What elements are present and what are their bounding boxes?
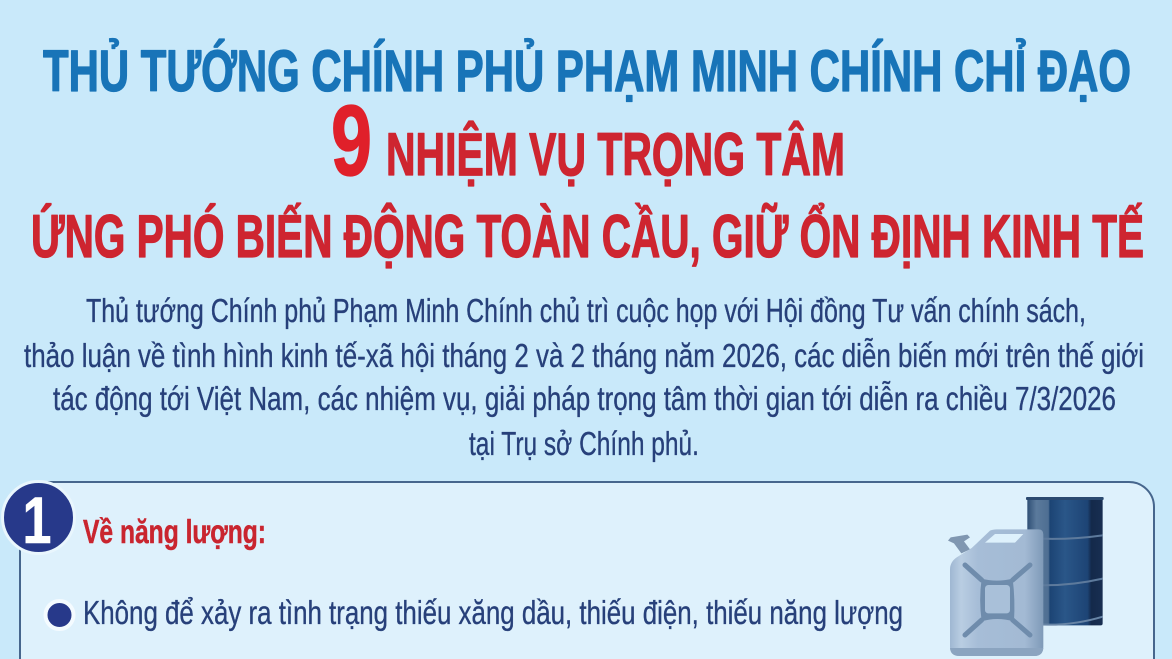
title line 2: NHIỆM VỤ TRỌNG TÂM bbox=[386, 121, 845, 188]
number badge 1 bbox=[2, 482, 74, 557]
intro text block: tại Trụ sở Chính phủ. bbox=[469, 425, 699, 462]
panel background bbox=[20, 482, 1154, 659]
title bbox=[31, 39, 1144, 270]
icon: oil barrel bbox=[1026, 497, 1104, 625]
number badge 1: 1 bbox=[22, 483, 52, 557]
title number 9: 9 bbox=[331, 85, 372, 197]
panel: energy bbox=[2, 482, 1154, 659]
section heading: Về năng lượng: bbox=[83, 513, 266, 550]
bullet text: Không để xảy ra tình trạng thiếu xăng dầu, thiếu điện, thiếu năng lượng bbox=[83, 594, 903, 631]
bullet dot bbox=[46, 601, 74, 629]
bullet item bbox=[46, 594, 903, 631]
icon: barrel and jerry can bbox=[948, 497, 1104, 656]
icon: jerry can bbox=[948, 529, 1043, 656]
intro text block bbox=[24, 292, 1144, 462]
